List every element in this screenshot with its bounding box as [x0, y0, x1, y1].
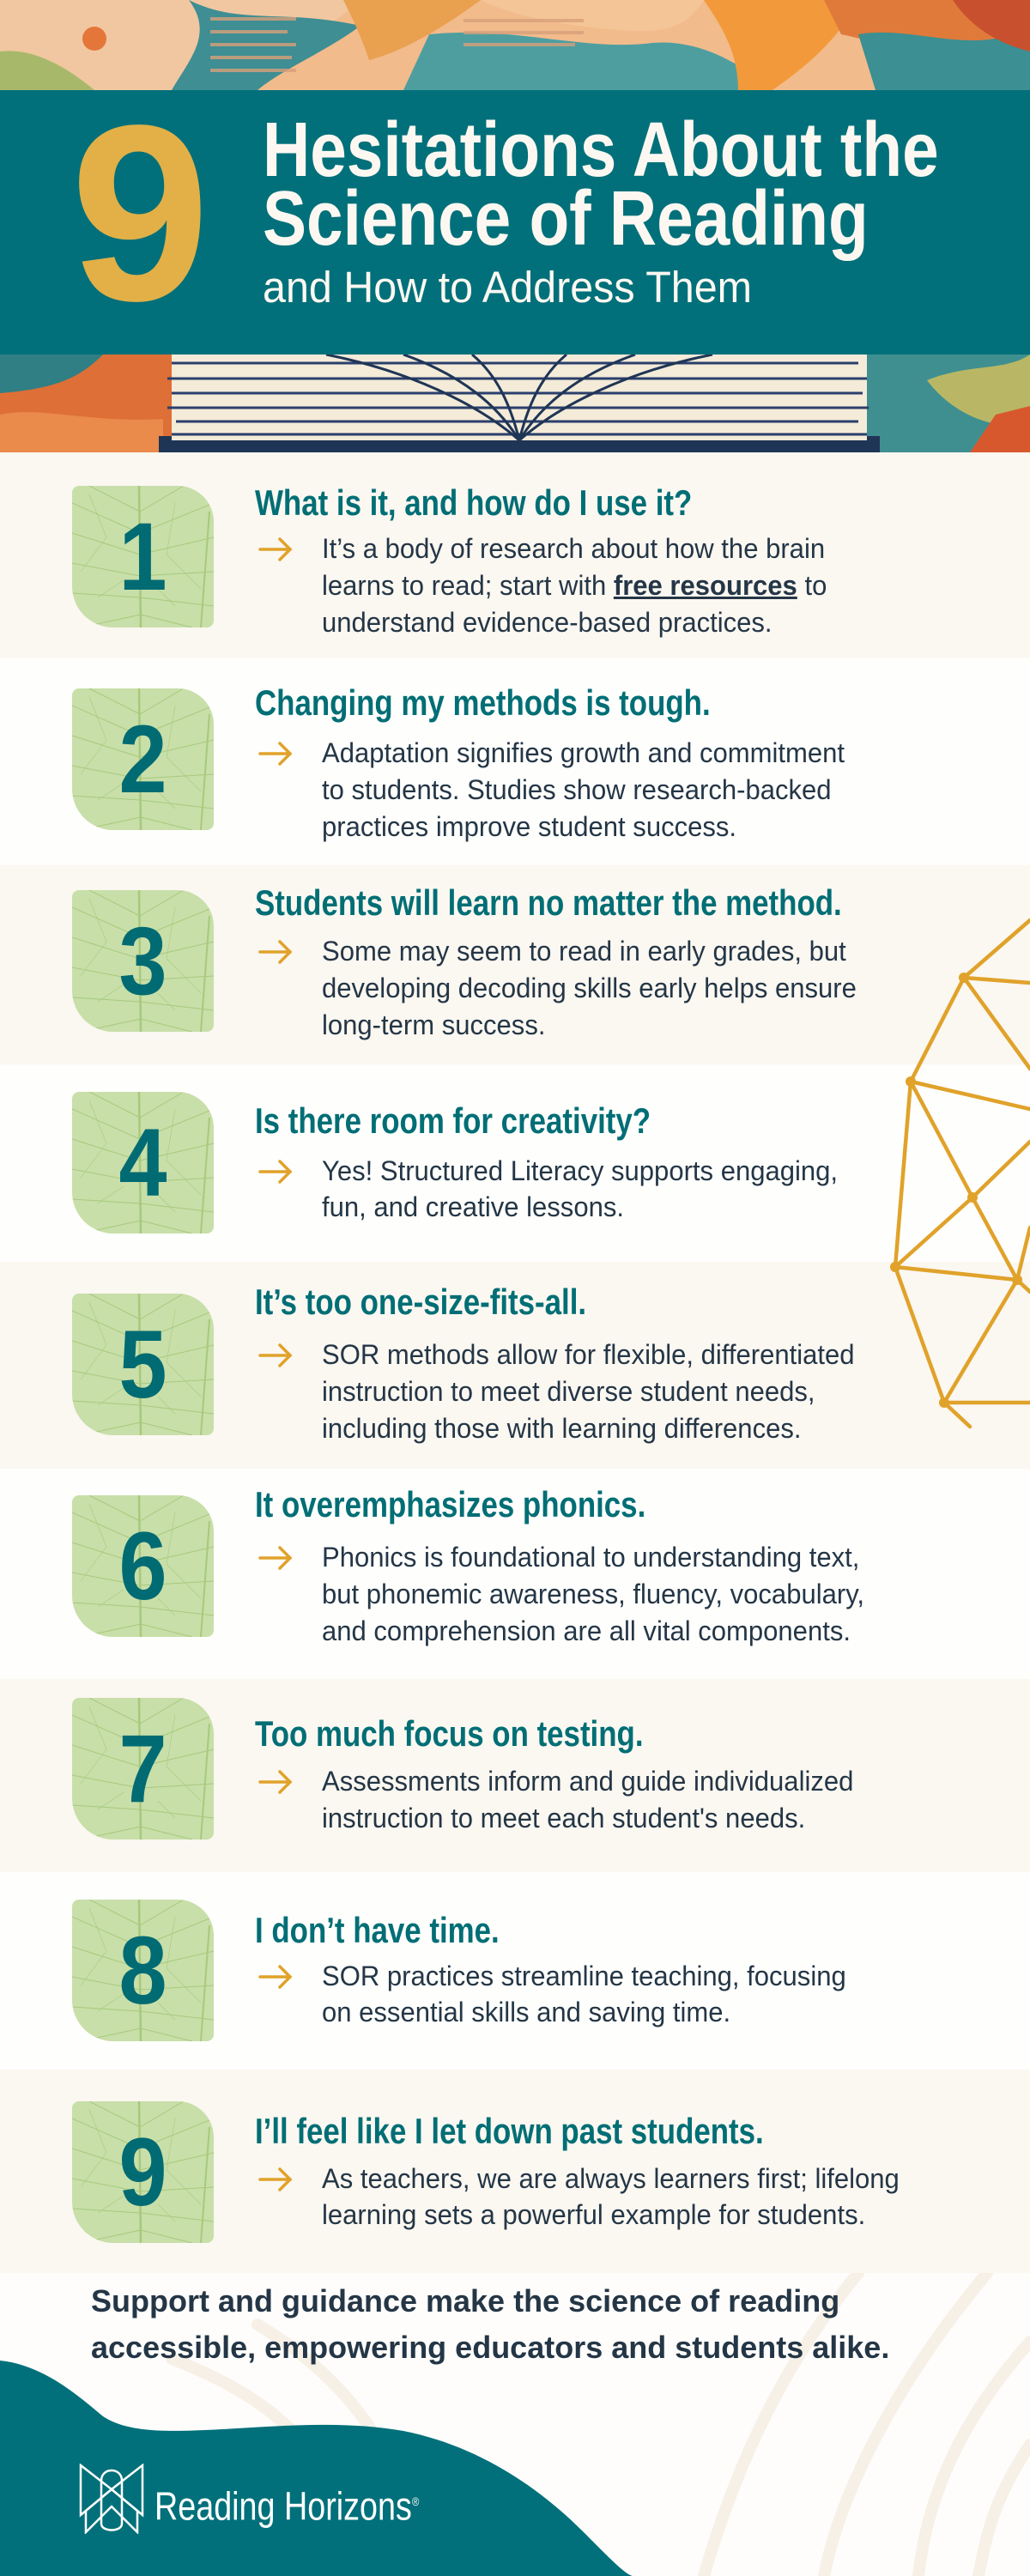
logo: Reading Horizons: [79, 2464, 419, 2534]
answer 6: but phonemic awareness, fluency, vocabulary,: [322, 1579, 864, 1609]
answer 3: Some may seem to read in early grades, but: [322, 936, 846, 967]
answer 8: [322, 1961, 846, 2027]
icon: number 2: 2: [118, 706, 167, 813]
item 2: [72, 682, 845, 842]
answer 3: developing decoding skills early helps ensure: [322, 973, 857, 1003]
item 8: [72, 1900, 846, 2041]
answer 5: instruction to meet diverse student needs,: [322, 1376, 815, 1407]
title text: Science of Reading: [263, 176, 869, 262]
heading 4: Is there room for creativity?: [255, 1100, 651, 1141]
answer 8: SOR practices streamline teaching, focusing: [322, 1961, 846, 1991]
arrow 6: [258, 1546, 292, 1570]
big number 9: 9: [70, 73, 209, 353]
answer 1: It’s a body of research about how the brain: [322, 533, 825, 564]
icon: logo mark: [79, 2464, 144, 2534]
icon: number 5: [72, 1294, 214, 1435]
heading 7: Too much focus on testing.: [255, 1713, 644, 1754]
icon: number 5: 5: [118, 1311, 167, 1418]
arrow 4: [258, 1160, 292, 1184]
closing statement: Support and guidance make the science of reading: [91, 2283, 839, 2318]
icon: number 1: 1: [118, 503, 167, 610]
icon: number 9: 9: [118, 2118, 167, 2226]
answer 6: [322, 1542, 864, 1646]
heading 8: I don’t have time.: [255, 1910, 500, 1950]
heading 5: It’s too one-size-fits-all.: [255, 1282, 586, 1322]
gold geometric network: [890, 918, 1030, 1428]
icon: number 8: 8: [118, 1917, 167, 2024]
arrow 7: [258, 1770, 292, 1794]
top banner art: [0, 0, 1030, 90]
answer 2: Adaptation signifies growth and commitment: [322, 737, 845, 768]
answer 4: fun, and creative lessons.: [322, 1191, 624, 1222]
header: title block: [0, 90, 1030, 355]
row 8: [0, 1872, 1030, 2070]
row 5: [0, 1262, 1030, 1469]
icon: number 4: [72, 1092, 214, 1233]
arrow 5: [258, 1343, 292, 1367]
answer 1: [322, 533, 827, 638]
icon: number 4: 4: [118, 1109, 167, 1216]
answer 5: [322, 1339, 855, 1444]
answer 4: Yes! Structured Literacy supports engaging,: [322, 1155, 838, 1186]
icon: number 9: [72, 2101, 214, 2243]
answer 7: Assessments inform and guide individualized: [322, 1766, 853, 1797]
heading 9: I’ll feel like I let down past students.: [255, 2111, 764, 2151]
icon: number 2: [72, 688, 214, 830]
row 9: [0, 2070, 1030, 2273]
answer 2: practices improve student success.: [322, 811, 736, 842]
icon: number 8: [72, 1900, 214, 2041]
icon: number 7: [72, 1698, 214, 1840]
answer 7: instruction to meet each student's needs.: [322, 1803, 805, 1834]
answer 2: to students. Studies show research-backed: [322, 774, 832, 805]
answer 4: [322, 1155, 838, 1222]
title text: and How to Address Them: [263, 263, 752, 312]
logo text: Reading Horizons®: [154, 2483, 419, 2528]
row 2: [0, 658, 1030, 865]
row 7: [0, 1679, 1030, 1872]
item 4: [72, 1092, 838, 1233]
answer 6: and comprehension are all vital components.: [322, 1615, 851, 1646]
row 4: [0, 1064, 1030, 1262]
answer 6: Phonics is foundational to understanding text,: [322, 1542, 859, 1573]
closing statement: accessible, empowering educators and students alike.: [91, 2330, 889, 2365]
answer 1: understand evidence-based practices.: [322, 607, 772, 638]
teal footer wave: [0, 2361, 633, 2576]
icon: number 6: [72, 1495, 214, 1637]
item 7: [72, 1698, 853, 1840]
icon: number 1: [72, 486, 214, 627]
answer 3: [322, 936, 857, 1040]
answer 8: on essential skills and saving time.: [322, 1997, 730, 2027]
arrow 3: [258, 940, 292, 964]
title text: Hesitations About the: [263, 107, 939, 193]
closing statement: [91, 2283, 889, 2365]
answer 2: [322, 737, 845, 842]
answer 7: [322, 1766, 853, 1834]
open book illustration: [0, 355, 1030, 452]
item 1: [72, 482, 827, 638]
heading 6: It overemphasizes phonics.: [255, 1484, 645, 1524]
item 3: [72, 882, 857, 1040]
answer 5: including those with learning differences.: [322, 1413, 801, 1444]
item 9: [72, 2101, 900, 2243]
title text: [263, 107, 939, 312]
answer 3: long-term success.: [322, 1009, 545, 1040]
answer 1: learns to read; start with free resources to: [322, 570, 827, 601]
icon: number 3: [72, 890, 214, 1032]
row 3: [0, 865, 1030, 1064]
footer background swirls: [166, 2273, 1030, 2576]
arrow 1: [258, 537, 292, 561]
answer 5: SOR methods allow for flexible, differentiated: [322, 1339, 855, 1370]
row 1: [0, 452, 1030, 658]
heading 3: Students will learn no matter the method.: [255, 882, 842, 923]
arrow 8: [258, 1965, 292, 1989]
icon: number 3: 3: [118, 907, 167, 1015]
icon: number 7: 7: [118, 1715, 167, 1822]
row 6: [0, 1469, 1030, 1679]
item 5: [72, 1282, 855, 1444]
heading 2: Changing my methods is tough.: [255, 682, 711, 723]
icon: number 6: 6: [118, 1512, 167, 1620]
item 6: [72, 1484, 864, 1646]
answer 9: As teachers, we are always learners first; lifelong: [322, 2163, 900, 2194]
heading 1: What is it, and how do I use it?: [255, 482, 692, 523]
answer 9: [322, 2163, 900, 2230]
answer 9: learning sets a powerful example for students.: [322, 2199, 865, 2230]
arrow 2: [258, 742, 292, 766]
arrow 9: [258, 2167, 292, 2191]
